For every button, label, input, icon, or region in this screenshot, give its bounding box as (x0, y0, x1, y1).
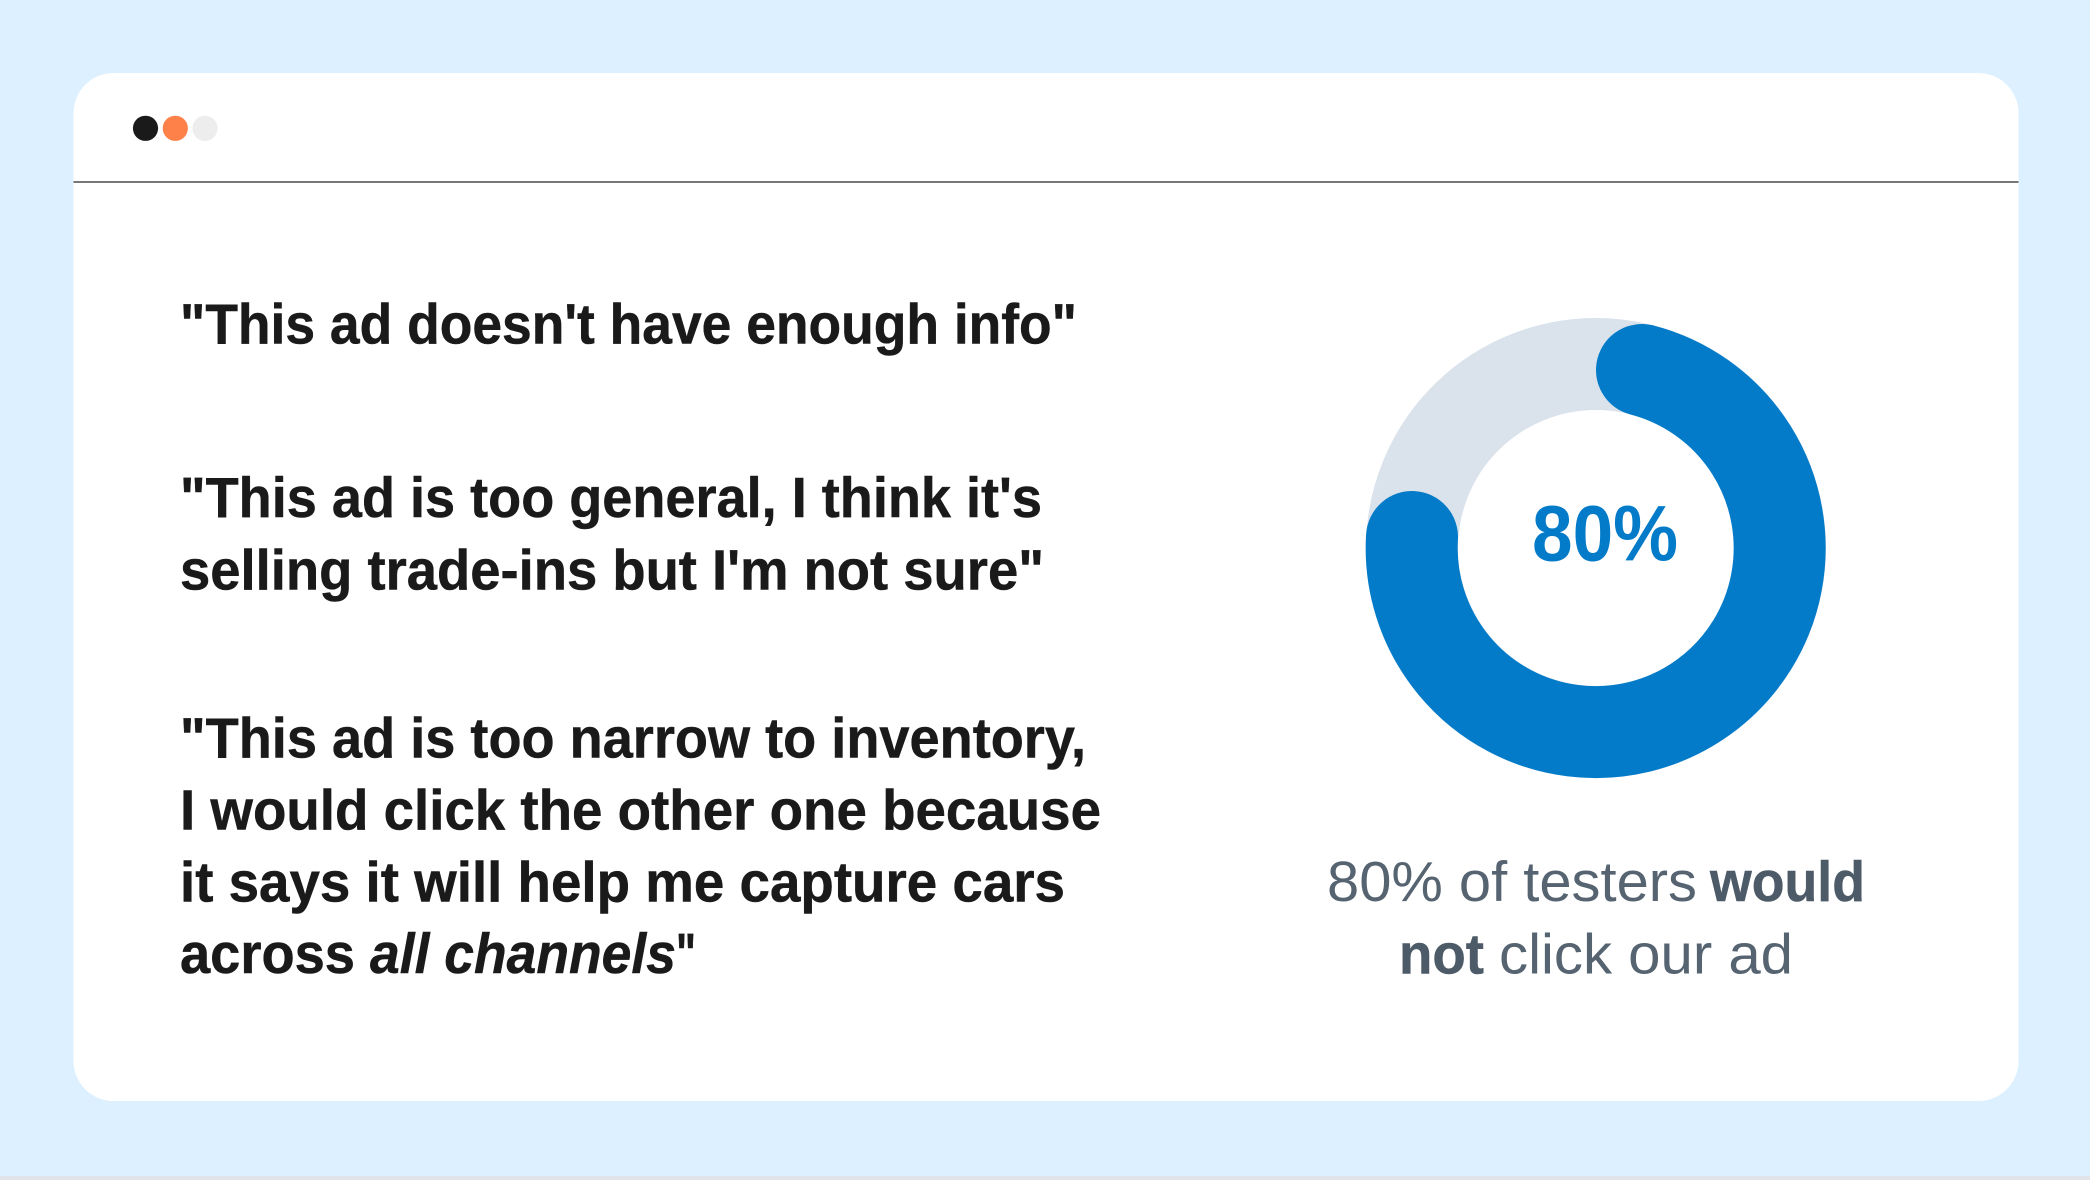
text block: third tester quote: " (676, 922, 696, 986)
text block: second tester quote: selling trade-ins but I'm not sure" (180, 538, 1044, 602)
text block: third tester quote: it says it will help me capture cars (180, 850, 1065, 914)
text block: donut caption: would (1709, 850, 1865, 914)
text block: third tester quote: all channels (370, 922, 676, 986)
chart: 80 percent donut (1412, 364, 1780, 732)
text block: third tester quote (180, 706, 1101, 986)
text block: second tester quote: "This ad is too general, I think it's (180, 466, 1042, 530)
text block: third tester quote: "This ad is too narrow to inventory, (180, 706, 1086, 770)
text block: donut caption (1327, 850, 1865, 986)
text block: donut caption: not (1399, 922, 1484, 986)
text block: third tester quote: I would click the other one because (180, 778, 1101, 842)
text block: second tester quote (180, 466, 1044, 602)
icon: window control dots (133, 116, 218, 141)
text block: first tester quote: "This ad doesn't have enough info" (180, 292, 1077, 356)
text block: third tester quote: across (180, 922, 355, 986)
text block: donut caption: click our ad (1499, 922, 1793, 986)
text block: donut caption: 80% of testers (1327, 850, 1697, 914)
donut value label: 80% (1532, 488, 1678, 578)
